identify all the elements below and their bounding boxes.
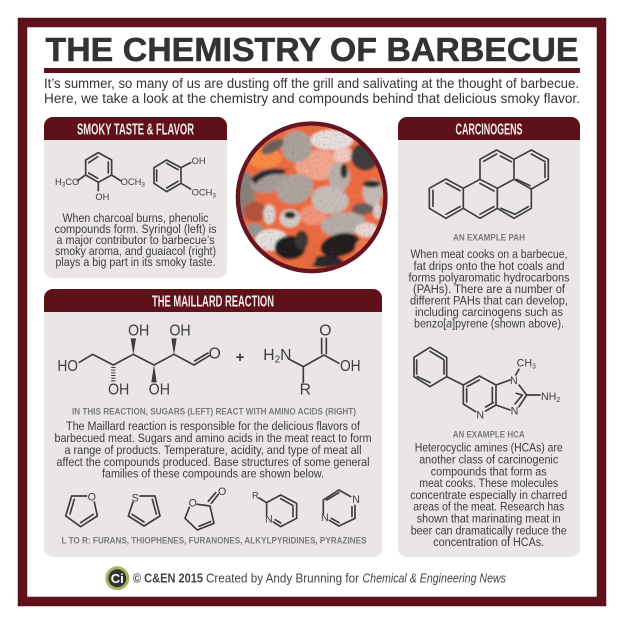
text: Maillard description [54, 419, 372, 481]
intro text [44, 75, 580, 106]
text: Maillard description: families of these compounds are shown below. [102, 467, 324, 481]
molecule: example HCA [414, 347, 560, 422]
text: Maillard description: The Maillard reaction is responsible for the delicious flavors of [66, 419, 361, 433]
molecule: amino acid: R [300, 382, 311, 399]
molecule: furanone [185, 486, 226, 530]
molecule: furanone: O [218, 486, 226, 498]
intro text: Here, we take a look at the chemistry and compounds behind that delicious smoky flavor. [44, 90, 580, 106]
molecule: syringol: H [55, 177, 62, 187]
text: Maillard description: barbecued meat. Sugars and amino acids in the meat react to form [54, 431, 372, 445]
caption: compound families: L TO R: FURANS, THIOPHENES, FURANONES, ALKYLPYRIDINES, PYRAZINES [62, 536, 367, 546]
text: HCA description: beer can dramatically reduce the [411, 523, 567, 537]
molecule: syringol [55, 153, 145, 202]
molecule: furanone: O [189, 498, 197, 510]
text: HCA description [410, 441, 567, 549]
panel header: carcinogens [398, 117, 580, 140]
molecule: sugar: OH [128, 323, 149, 340]
panel header: Maillard [44, 289, 382, 312]
text: smoky description: plays a big part in its smoky taste. [56, 255, 216, 269]
icon: Compound Interest logo [105, 566, 129, 590]
molecule: pyrazine [321, 490, 360, 526]
text: Maillard description: a range of products. Temperature, acidity, and type of meat all [64, 443, 362, 457]
molecule: guaiacol: 3 [212, 192, 216, 199]
text: credit line: © C&EN 2015 [133, 572, 203, 586]
text: PAH description: forms polyaromatic hydrocarbons [408, 270, 570, 284]
photo: glowing charcoal [236, 121, 388, 274]
text: PAH description: fat drips onto the hot coals and [414, 259, 564, 273]
heading: carcinogens: CARCINOGENS [456, 122, 523, 138]
molecule: example PAH [429, 150, 548, 218]
caption: reaction: IN THIS REACTION, SUGARS (LEFT) REACT WITH AMINO ACIDS (RIGHT) [72, 406, 356, 416]
molecule: guaiacol: OCH [192, 188, 212, 198]
text: HCA description: concentration of HCAs. [433, 535, 544, 549]
molecule: alkylpyridine: R [252, 490, 259, 500]
panel: carcinogens [398, 117, 580, 557]
molecule: thiophene: S [132, 492, 139, 504]
molecule: guaiacol: OH [192, 156, 206, 166]
molecule: alkylpyridine [252, 490, 297, 527]
text: PAH description: including carcinogens such as [415, 305, 563, 319]
text: PAH description: different PAHs that can develop, [410, 294, 568, 308]
molecule: amino acid [263, 323, 361, 399]
text: HCA description: Heterocyclic amines (HCAs) are [415, 441, 563, 455]
molecule: syringol: OCH [121, 177, 141, 187]
molecule: example HCA: CH [517, 358, 532, 370]
molecule: amino acid: N [280, 347, 291, 364]
molecule: furan: O [88, 492, 96, 504]
text: HCA description: concentrate especially in charred [410, 488, 567, 502]
molecule: amino acid: O [319, 323, 331, 340]
molecule: example HCA: N [511, 406, 518, 418]
molecule: syringol: OH [95, 192, 109, 202]
icon: Compound Interest logo: Ci [111, 571, 124, 586]
panel: smoky taste and flavor [44, 117, 227, 278]
molecule: furan [66, 492, 97, 527]
molecule: amino acid: H [263, 347, 275, 364]
caption: example PAH: AN EXAMPLE PAH [453, 232, 525, 242]
text: PAH description: benzo[a]pyrene (shown above). [414, 316, 564, 330]
text: credit line [133, 572, 506, 586]
molecule: amino acid: 2 [275, 355, 281, 366]
text: PAH description: (PAHs). There are a number of [413, 282, 566, 296]
text: smoky description [54, 211, 216, 269]
molecule: sugar: O [209, 345, 221, 362]
molecule: sugar: HO [57, 358, 78, 375]
title: THE CHEMISTRY OF BARBECUE [46, 31, 578, 68]
caption: example HCA: AN EXAMPLE HCA [453, 430, 525, 440]
molecule: syringol: 3 [62, 182, 66, 189]
text: smoky description: compounds form. Syringol (left) is [54, 222, 216, 236]
molecule: guaiacol [154, 156, 216, 199]
text: smoky description: a major contributor to barbecue’s [56, 233, 214, 247]
text: HCA description: areas of the meat. Research has [413, 500, 564, 514]
molecule: sugar: OH [108, 382, 129, 399]
molecule: syringol: CO [65, 177, 79, 187]
text: credit line: Created by Andy Brunning for [206, 572, 359, 586]
title rule [44, 68, 580, 73]
panel header: smoky [44, 117, 227, 140]
text: HCA description: meat cooks. These molecules [419, 476, 558, 490]
molecule: thiophene [128, 492, 160, 526]
text: PAH description: When meat cooks on a barbecue, [410, 247, 568, 261]
plus sign: + [236, 349, 245, 366]
molecule: example HCA: N [510, 375, 518, 387]
molecule: pyrazine: N [321, 512, 329, 524]
molecule: sugar: OH [169, 323, 191, 340]
molecule: pyrazine: N [352, 494, 360, 506]
text: smoky description: smoky aroma, and guaiacol (right) [55, 244, 216, 258]
text: HCA description: compounds that form as [431, 464, 547, 478]
text: HCA description: another class of carcinogenic [419, 452, 558, 466]
footer credit [105, 566, 506, 590]
panel: the Maillard reaction [44, 289, 382, 557]
text: Maillard description: affect the compounds produced. Base structures of some general [56, 455, 370, 469]
molecule: example HCA: NH [541, 391, 556, 403]
molecule: alkylpyridine: N [265, 514, 273, 526]
text: HCA description: shown that marinating meat in [417, 511, 561, 525]
heading: the Maillard reaction: THE MAILLARD REACTION [152, 294, 274, 310]
molecule: example HCA: N [476, 410, 484, 422]
molecule: example HCA: 2 [556, 397, 560, 404]
molecule: syringol: 3 [141, 182, 145, 189]
molecule: example HCA: 3 [532, 364, 536, 371]
molecule: sugar [57, 323, 221, 399]
text: PAH description [408, 247, 570, 330]
molecule: amino acid: OH [340, 358, 361, 375]
heading: smoky taste and flavor: SMOKY TASTE & FLAVOR [77, 122, 194, 138]
intro text: It’s summer, so many of us are dusting off the grill and salivating at the thought of barbecue. [44, 75, 579, 91]
text: smoky description: When charcoal burns, phenolic [62, 211, 208, 225]
text: credit line: Chemical & Engineering News [362, 572, 506, 586]
molecule: sugar: OH [149, 382, 170, 399]
